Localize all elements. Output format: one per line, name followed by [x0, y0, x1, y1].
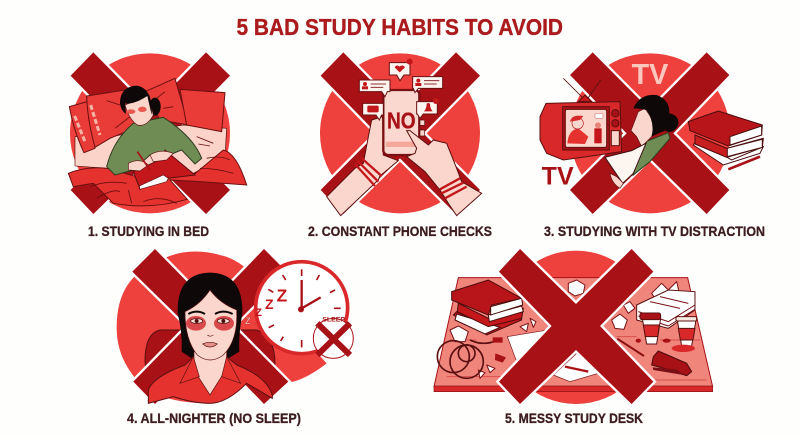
panel: all-nighter: Z: [255, 307, 262, 319]
face: [125, 95, 153, 125]
panel: messy study desk: [434, 247, 713, 406]
prohibition cross: [568, 51, 731, 216]
coffee spill: [672, 345, 695, 352]
red circle background: [570, 53, 730, 213]
stacked red books: [688, 111, 763, 165]
label 3: 3. STUDYING WITH TV DISTRACTION: [544, 223, 765, 239]
sleep crossed badge: SLEEP: [322, 316, 345, 323]
right hand with bracelets: [407, 131, 482, 216]
sleep crossed badge: [313, 316, 353, 358]
hair: [120, 86, 152, 115]
prohibition cross: [131, 247, 290, 406]
panel: studying with tv distraction: [540, 51, 763, 216]
pen on paper: [565, 367, 588, 372]
loose pen: [617, 339, 644, 356]
eye bags: [186, 316, 206, 331]
red circle background: [320, 53, 480, 213]
wood lines: [447, 290, 707, 380]
label 1: 1. STUDYING IN BED: [88, 223, 209, 239]
panel: all-nighter: Z: [245, 316, 251, 326]
green shirt: [107, 117, 202, 175]
notification bubbles: [359, 63, 443, 120]
desk front edge: [434, 386, 713, 392]
shirt: [148, 357, 272, 403]
desk top: [434, 278, 713, 387]
tv word dark: TV: [542, 164, 574, 191]
panel: studying in bed: [68, 51, 247, 216]
coffee cups: [640, 313, 697, 346]
pillows: [69, 78, 225, 153]
tv set: [540, 78, 622, 160]
hair back: [178, 273, 242, 358]
hands and pen: [128, 151, 173, 171]
panel: all-nighter: [117, 247, 353, 406]
red circle background: [499, 251, 653, 404]
phone side buttons: [420, 120, 425, 136]
zzz letters: Z: [277, 286, 288, 306]
phone lower bar: [386, 142, 417, 147]
phone: [383, 90, 419, 155]
prohibition cross: [319, 51, 482, 216]
prohibition cross: [497, 247, 655, 406]
bubble icons: [362, 59, 439, 112]
label 5: 5. MESSY STUDY DESK: [505, 410, 643, 426]
cable tangle: [437, 340, 498, 378]
stapler: [652, 351, 692, 376]
hair back bun: [149, 98, 161, 116]
panel: all-nighter: Z: [265, 296, 274, 312]
bed sheet: [75, 125, 227, 173]
red background blob: [117, 252, 327, 403]
no label: NO: [387, 108, 416, 134]
tv show characters: [567, 128, 588, 144]
red pen: [728, 157, 760, 169]
brows nose mouth: [188, 312, 233, 314]
face: [185, 290, 237, 360]
tv word large light: TV: [632, 59, 668, 91]
plug and usb: [493, 337, 506, 363]
crumpled paper: [450, 280, 679, 378]
open red book: [133, 150, 195, 189]
pillow stripes: [75, 105, 100, 142]
label 2: 2. CONSTANT PHONE CHECKS: [308, 223, 492, 239]
woman with open book: [605, 95, 678, 188]
blanket: [68, 150, 247, 206]
title: 5 BAD STUDY HABITS TO AVOID: [236, 14, 563, 40]
clock: [256, 262, 348, 354]
loose papers: [507, 328, 548, 362]
stacked books: [452, 280, 523, 335]
paper stack: [637, 290, 695, 328]
clock hands: [302, 280, 321, 308]
under-eye shadows: [127, 109, 135, 114]
red circle background: [70, 53, 230, 213]
left hand with bracelets: [327, 117, 398, 216]
panel: constant phone checks: [319, 51, 482, 216]
eyes: [191, 319, 203, 323]
neck and collar: [194, 352, 227, 395]
label 4: 4. ALL-NIGHTER (NO SLEEP): [127, 410, 301, 426]
chair: [145, 330, 275, 377]
prohibition cross: [69, 51, 232, 216]
